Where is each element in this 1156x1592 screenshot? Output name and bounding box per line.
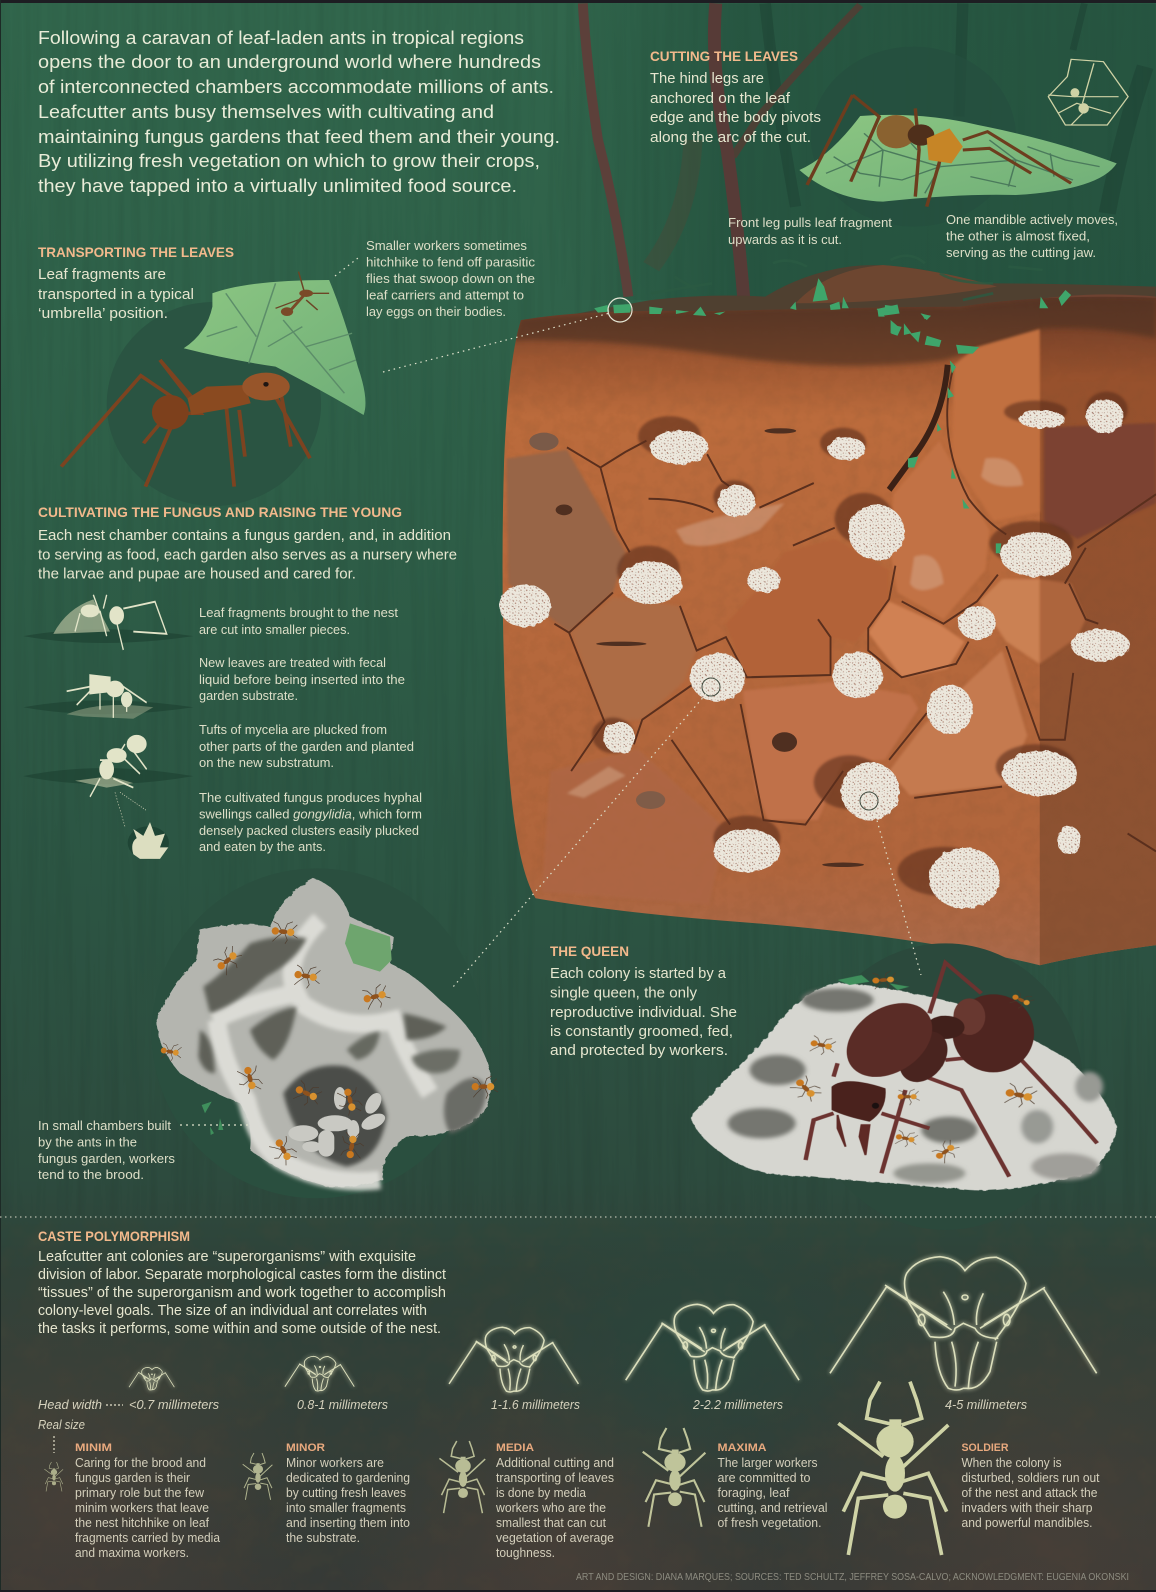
text: the queen: and protected by workers. — [550, 1043, 728, 1059]
head: minor — [285, 1356, 354, 1391]
text: fungus steps: and eaten by the ants. — [199, 840, 326, 854]
head width labels: <0.7 millimeters — [129, 1397, 219, 1412]
intro paragraph: By utilizing fresh vegetation on which to grow their crops, — [38, 151, 540, 171]
head width labels: 4-5 millimeters — [945, 1397, 1027, 1412]
caste: media — [439, 1441, 614, 1560]
caste: minim: fragments carried by media — [75, 1531, 220, 1545]
text: caste polymorphism — [38, 1228, 446, 1337]
head: maxima — [626, 1304, 799, 1391]
silhouette: minor — [243, 1453, 272, 1500]
text: hitchhiking workers: leaf carriers and attempt to — [366, 288, 524, 302]
text: the queen: Each colony is started by a — [550, 966, 727, 982]
text: caste polymorphism: colony-level goals. The size of an individual ant correlates with — [38, 1303, 427, 1319]
text: hitchhiking workers: Smaller workers sometimes — [366, 239, 527, 253]
queen body — [829, 989, 1034, 1155]
icon: cut leaf fragment — [799, 115, 1117, 202]
leader: brood label — [180, 1124, 250, 1126]
silhouette: media — [439, 1441, 485, 1513]
text: brood chambers note: In small chambers built — [38, 1119, 172, 1133]
panel: the queen illustration — [690, 943, 1117, 1230]
leaf fragment — [184, 280, 365, 415]
leader: chamber to queen — [874, 810, 921, 975]
text: hitchhiking workers: hitchhike to fend off parasitic — [366, 256, 535, 270]
heading: cutting the leaves: CUTTING THE LEAVES — [650, 48, 798, 64]
carrier ant — [61, 360, 310, 487]
text: front leg note — [728, 216, 893, 247]
caste: media: transporting of leaves — [496, 1471, 614, 1485]
text: caste polymorphism: the tasks it performs, some within and some outside of the nest. — [38, 1321, 441, 1337]
step 3: planting mycelia — [75, 736, 147, 797]
panel: soil block with nest chambers — [499, 280, 1156, 980]
caste: media: toughness. — [496, 1546, 555, 1560]
caste: minor: into smaller fragments — [286, 1501, 406, 1515]
caste: maxima: of fresh vegetation. — [718, 1516, 822, 1530]
text: mandible note — [946, 213, 1118, 260]
text: caste polymorphism: Leafcutter ant colonies are “superorganisms” with exquisite — [38, 1249, 416, 1265]
caste: minor: the substrate. — [286, 1531, 360, 1545]
head width labels: 2-2.2 millimeters — [692, 1397, 783, 1412]
text: fungus steps: densely packed clusters easily plucked — [199, 824, 419, 838]
text: mandible note: the other is almost fixed, — [946, 230, 1090, 244]
leaf veins — [826, 133, 1100, 193]
text: transporting the leaves — [38, 244, 234, 322]
caste: soldier: disturbed, soldiers run out — [962, 1471, 1100, 1485]
text: brood chambers note — [38, 1119, 175, 1182]
leaf scrap — [838, 975, 909, 990]
ant: cutting worker — [807, 95, 1071, 207]
leaf veins — [207, 283, 356, 393]
illustrations: fungus cultivation steps — [23, 595, 193, 859]
panel: fungus garden close-up — [152, 868, 498, 1198]
text: transporting the leaves: ‘umbrella’ position. — [38, 306, 168, 322]
soil texture — [516, 297, 1156, 834]
dotted size markers — [54, 1405, 123, 1453]
silhouette: minim — [44, 1462, 63, 1491]
text: mandible note: serving as the cutting jaw. — [946, 246, 1096, 260]
leader: chamber to garden — [453, 694, 706, 987]
text: the queen: is constantly groomed, fed, — [550, 1024, 733, 1040]
backdrop circle — [152, 868, 482, 1198]
text: cutting the leaves: along the arc of the cut. — [650, 130, 811, 146]
leaf trail on the surface — [594, 278, 1071, 335]
caste: minor: and inserting them into — [286, 1516, 410, 1530]
text: cultivating the fungus: to serving as food, each garden also serves as a nursery where — [38, 548, 457, 564]
text: hitchhiking workers: lay eggs on their bodies. — [366, 305, 506, 319]
intro paragraph: of interconnected chambers accommodate millions of ants. — [38, 77, 554, 97]
caste: media: workers who are the — [495, 1501, 606, 1515]
text: transporting the leaves: transported in a typical — [38, 287, 194, 303]
text: cutting the leaves: anchored on the leaf — [650, 91, 791, 107]
caste: soldier — [838, 1382, 1100, 1555]
leaf on garden — [345, 923, 392, 972]
intro paragraph — [38, 28, 560, 196]
caste: media: vegetation of average — [496, 1531, 614, 1545]
caste: minim: the nest hitchhike on leaf — [75, 1516, 210, 1530]
text: the queen: reproductive individual. She — [550, 1005, 737, 1021]
text: cultivating the fungus: the larvae and pupae are housed and cared for. — [38, 566, 356, 582]
intro paragraph: they have tapped into a virtually unlimited food source. — [38, 176, 517, 196]
text: the queen — [550, 943, 737, 1059]
text: fungus steps — [199, 606, 422, 854]
head: minim — [129, 1367, 174, 1390]
caste: maxima: cutting, and retrieval — [718, 1501, 828, 1515]
label: minim: MINIM — [75, 1442, 112, 1454]
caste: minor: Minor workers are — [286, 1456, 384, 1470]
tunnel cracks — [554, 365, 1156, 851]
caste: soldier: invaders with their sharp — [962, 1501, 1093, 1515]
white fungus ridges — [213, 920, 430, 1181]
empty holes — [529, 428, 864, 867]
backdrop circle — [107, 302, 321, 506]
backdrop circle — [808, 943, 1083, 1230]
green fragments — [202, 1102, 223, 1135]
text: cultivating the fungus — [38, 504, 457, 582]
dark depressions — [198, 937, 487, 1167]
text: brood chambers note: by the ants in the — [38, 1136, 137, 1150]
shadow bands — [23, 629, 193, 784]
caste: minor: by cutting fresh leaves — [286, 1486, 406, 1500]
callout circle: leaf on the surface — [608, 298, 632, 322]
text: caste polymorphism: “tissues” of the superorganism and work together to accomplish — [38, 1285, 446, 1301]
text: fungus steps: New leaves are treated with fecal — [199, 656, 386, 670]
head width labels: 0.8-1 millimeters — [297, 1397, 388, 1412]
light soil slabs — [506, 329, 1156, 905]
head: media — [449, 1327, 578, 1392]
text: fungus steps: are cut into smaller pieces. — [199, 623, 350, 637]
text: fungus steps: Leaf fragments brought to the nest — [199, 606, 399, 620]
text: brood chambers note: tend to the brood. — [38, 1168, 144, 1182]
intro paragraph: maintaining fungus gardens that feed them and their young. — [38, 127, 560, 147]
soil block side — [1040, 298, 1156, 965]
step 1: cutting leaf pieces — [53, 595, 167, 650]
caste: minor: dedicated to gardening — [286, 1471, 410, 1485]
text: fungus steps: The cultivated fungus produces hyphal — [199, 791, 422, 805]
text: hitchhiking workers — [366, 239, 535, 319]
caste: minor — [243, 1442, 410, 1545]
head width labels: Real size — [38, 1417, 85, 1432]
heading: transporting the leaves: TRANSPORTING THE LEAVES — [38, 244, 234, 260]
callout circle: chamber — [702, 678, 720, 696]
label: soldier: SOLDIER — [962, 1442, 1009, 1454]
text: front leg note: upwards as it is cut. — [728, 233, 842, 247]
head width labels — [38, 1397, 1027, 1432]
garden rock — [157, 878, 491, 1187]
text: hitchhiking workers: flies that swoop down on the — [366, 272, 535, 286]
garden rock — [690, 983, 1117, 1190]
text: mandible note: One mandible actively moves, — [946, 213, 1118, 227]
head width labels: Head width — [38, 1397, 102, 1412]
caste: minim: primary role but the few — [75, 1486, 205, 1500]
label: minor: MINOR — [286, 1442, 325, 1454]
text: fungus steps: on the new substratum. — [199, 756, 334, 770]
text: transporting the leaves: Leaf fragments are — [38, 267, 166, 283]
callout circle: queen chamber — [860, 792, 878, 810]
text: front leg note: Front leg pulls leaf fragment — [728, 216, 893, 230]
text: fungus steps: garden substrate. — [199, 689, 298, 703]
caste: minim: and maxima workers. — [75, 1546, 189, 1560]
dark depressions — [728, 988, 1103, 1183]
heading: cultivating the fungus: CULTIVATING THE FUNGUS AND RAISING THE YOUNG — [38, 504, 402, 520]
panel: cutting the leaves ant on leaf — [799, 95, 1117, 207]
caste: maxima: foraging, leaf — [718, 1486, 790, 1500]
text: fungus steps: liquid before being inserted into the — [199, 673, 405, 687]
text: fungus steps: other parts of the garden and planted — [199, 740, 414, 754]
text: cutting the leaves: The hind legs are — [650, 71, 764, 87]
intro paragraph: Following a caravan of leaf-laden ants in tropical regions — [38, 28, 524, 48]
head width labels: 1-1.6 millimeters — [491, 1397, 580, 1412]
heading: the queen: THE QUEEN — [550, 943, 629, 959]
chamber shadows — [592, 392, 1128, 896]
label: media: MEDIA — [496, 1442, 534, 1454]
panel: transporting the leaves illustration — [61, 272, 365, 506]
text: cultivating the fungus: Each nest chamber contains a fungus garden, and, in addition — [38, 528, 451, 544]
intro paragraph: opens the door to an underground world where hundreds — [38, 52, 541, 72]
text: cutting the leaves: edge and the body pivots — [650, 110, 821, 126]
worker ants — [788, 970, 1040, 1165]
head: soldier — [830, 1257, 1097, 1390]
label: maxima: MAXIMA — [718, 1442, 767, 1454]
caste: minim: minim workers that leave — [75, 1501, 209, 1515]
caste: maxima: are committed to — [718, 1471, 811, 1485]
fungus gardens — [499, 399, 1130, 909]
worker ants — [159, 920, 498, 1169]
text: fungus steps: Tufts of mycelia are plucked from — [199, 723, 387, 737]
caste: media: is done by media — [496, 1486, 586, 1500]
caste: soldier: and powerful mandibles. — [962, 1516, 1092, 1530]
heading: caste polymorphism: CASTE POLYMORPHISM — [38, 1228, 190, 1244]
intro paragraph: Leafcutter ants busy themselves with cultivating and — [38, 102, 494, 122]
gongylidia cluster — [128, 822, 169, 859]
caste: soldier: of the nest and attack the — [962, 1486, 1098, 1500]
caste: minim: fungus garden is their — [75, 1471, 190, 1485]
text: the queen: single queen, the only — [550, 986, 698, 1002]
zoom lines — [115, 792, 147, 827]
soil block front — [503, 297, 1156, 965]
brood: larvae and pupae — [288, 1087, 388, 1157]
text: fungus steps: swellings called gongylidia, which form — [199, 808, 422, 822]
caste: media: smallest that can cut — [496, 1516, 606, 1530]
queen legs — [806, 963, 1097, 1177]
hitchhiker ant — [276, 272, 329, 316]
step 2: treating leaves with fecal liquid — [67, 675, 153, 719]
icon: ant on leaf outline — [1048, 59, 1128, 125]
silhouette: maxima — [643, 1428, 705, 1527]
text: brood chambers note: fungus garden, workers — [38, 1152, 175, 1166]
silhouette: soldier — [838, 1382, 948, 1555]
leaf fragments in tunnel — [877, 305, 1001, 553]
caste: media: Additional cutting and — [496, 1456, 614, 1470]
text: cutting the leaves — [650, 48, 821, 146]
forest scene behind the cutting illustration — [560, 3, 1156, 340]
caste: minim — [44, 1442, 220, 1560]
caste: maxima — [643, 1428, 828, 1530]
head outlines by caste — [129, 1257, 1097, 1392]
text: caste polymorphism: division of labor. Separate morphological castes form the distinct — [38, 1267, 446, 1283]
divider — [0, 1216, 1156, 1218]
caste: minim: Caring for the brood and — [75, 1456, 206, 1470]
leader: hitchhiker to surface — [335, 258, 610, 372]
caste: maxima: The larger workers — [718, 1456, 818, 1470]
caste: soldier: When the colony is — [962, 1456, 1062, 1470]
